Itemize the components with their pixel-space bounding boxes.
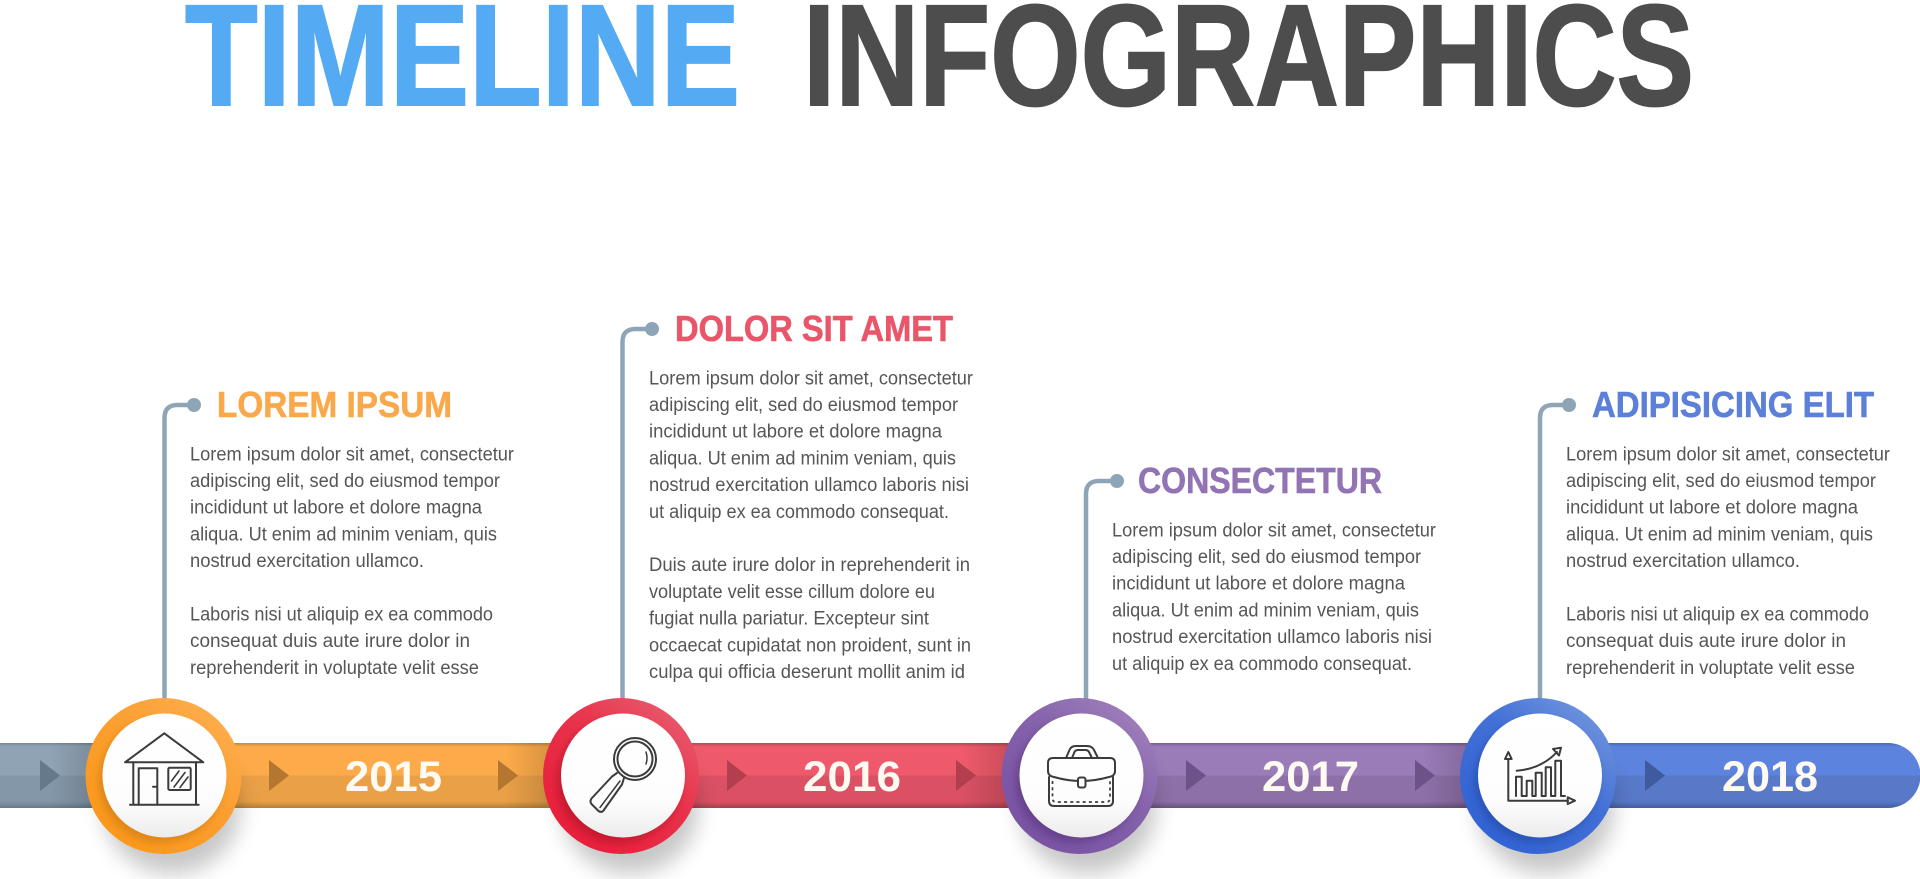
body text: consequat duis aute irure dolor in (1566, 631, 1846, 652)
body text: Laboris nisi ut aliquip ex ea commodo (190, 605, 493, 626)
body text (1112, 520, 1437, 675)
connector 2016 (622, 322, 659, 700)
body text: aliqua. Ut enim ad minim veniam, quis (649, 448, 956, 469)
segment: 2015: 2015 (345, 753, 442, 801)
body text: reprehenderit in voluptate velit esse (190, 658, 479, 679)
body text: incididunt ut labore et dolore magna (1566, 498, 1858, 519)
node: 2016 magnifier (543, 698, 699, 874)
body text: adipiscing elit, sed do eiusmod tempor (1566, 471, 1877, 492)
title (185, 0, 1694, 136)
body text: Lorem ipsum dolor sit amet, consectetur (190, 444, 515, 465)
body text: consequat duis aute irure dolor in (190, 631, 470, 652)
body text: occaecat cupidatat non proident, sunt in (649, 635, 971, 656)
body text: aliqua. Ut enim ad minim veniam, quis (1566, 524, 1873, 545)
body text: nostrud exercitation ullamco laboris nisi (1112, 627, 1432, 648)
heading: CONSECTETUR (1138, 460, 1382, 501)
body text: aliqua. Ut enim ad minim veniam, quis (1112, 600, 1419, 621)
node: 2015 house (86, 698, 242, 874)
body text: nostrud exercitation ullamco. (190, 551, 424, 572)
body text: incididunt ut labore et dolore magna (190, 498, 482, 519)
panel: adipisicing elit (1566, 384, 1891, 679)
heading: ADIPISICING ELIT (1592, 384, 1874, 425)
connector 2015 (164, 398, 201, 700)
body text (649, 368, 974, 683)
segment: 2016: 2016 (803, 753, 901, 801)
body text: reprehenderit in voluptate velit esse (1566, 658, 1855, 679)
body text: Lorem ipsum dolor sit amet, consectetur (1566, 444, 1891, 465)
icon: growth chart (1505, 748, 1575, 804)
body text: adipiscing elit, sed do eiusmod tempor (190, 471, 501, 492)
icon: briefcase (1048, 746, 1115, 806)
node: 2017 briefcase (1002, 698, 1158, 874)
body text: ut aliquip ex ea commodo consequat. (649, 502, 949, 523)
body text: Duis aute irure dolor in reprehenderit in (649, 555, 970, 576)
body text: culpa qui officia deserunt mollit anim id (649, 662, 965, 683)
segment: 2016 (622, 743, 1080, 808)
segment: 2018: 2018 (1722, 753, 1818, 801)
segment: lead-in (0, 743, 164, 808)
segment: 2017 (1080, 743, 1538, 808)
body text (190, 444, 515, 679)
heading: DOLOR SIT AMET (675, 308, 953, 349)
icon: magnifier (590, 738, 656, 812)
body text: adipiscing elit, sed do eiusmod tempor (1112, 547, 1422, 568)
segment: 2018 (1538, 743, 1920, 808)
segment: 2015 (164, 743, 622, 808)
body text: nostrud exercitation ullamco. (1566, 551, 1800, 572)
panel: dolor sit amet (649, 308, 974, 683)
timeline bar (0, 743, 1920, 808)
body text (1566, 444, 1891, 679)
body text: nostrud exercitation ullamco laboris nisi (649, 475, 969, 496)
segment: 2017: 2017 (1262, 753, 1359, 801)
body text: incididunt ut labore et dolore magna (649, 422, 942, 443)
connector 2017 (1086, 474, 1124, 700)
icon: house (125, 733, 203, 805)
node: 2018 chart (1460, 698, 1616, 874)
body text: adipiscing elit, sed do eiusmod tempor (649, 395, 959, 416)
panel: lorem ipsum (190, 384, 515, 679)
panel: consectetur (1112, 460, 1437, 675)
body text: Lorem ipsum dolor sit amet, consectetur (1112, 520, 1437, 541)
heading: LOREM IPSUM (217, 384, 452, 425)
body text: voluptate velit esse cillum dolore eu (649, 582, 935, 603)
body text: Lorem ipsum dolor sit amet, consectetur (649, 368, 974, 389)
connector 2018 (1540, 398, 1576, 700)
body text: incididunt ut labore et dolore magna (1112, 574, 1405, 595)
body text: aliqua. Ut enim ad minim veniam, quis (190, 524, 497, 545)
body text: Laboris nisi ut aliquip ex ea commodo (1566, 605, 1869, 626)
body text: ut aliquip ex ea commodo consequat. (1112, 654, 1412, 675)
body text: fugiat nulla pariatur. Excepteur sint (649, 609, 930, 630)
connector lines (164, 322, 1576, 700)
